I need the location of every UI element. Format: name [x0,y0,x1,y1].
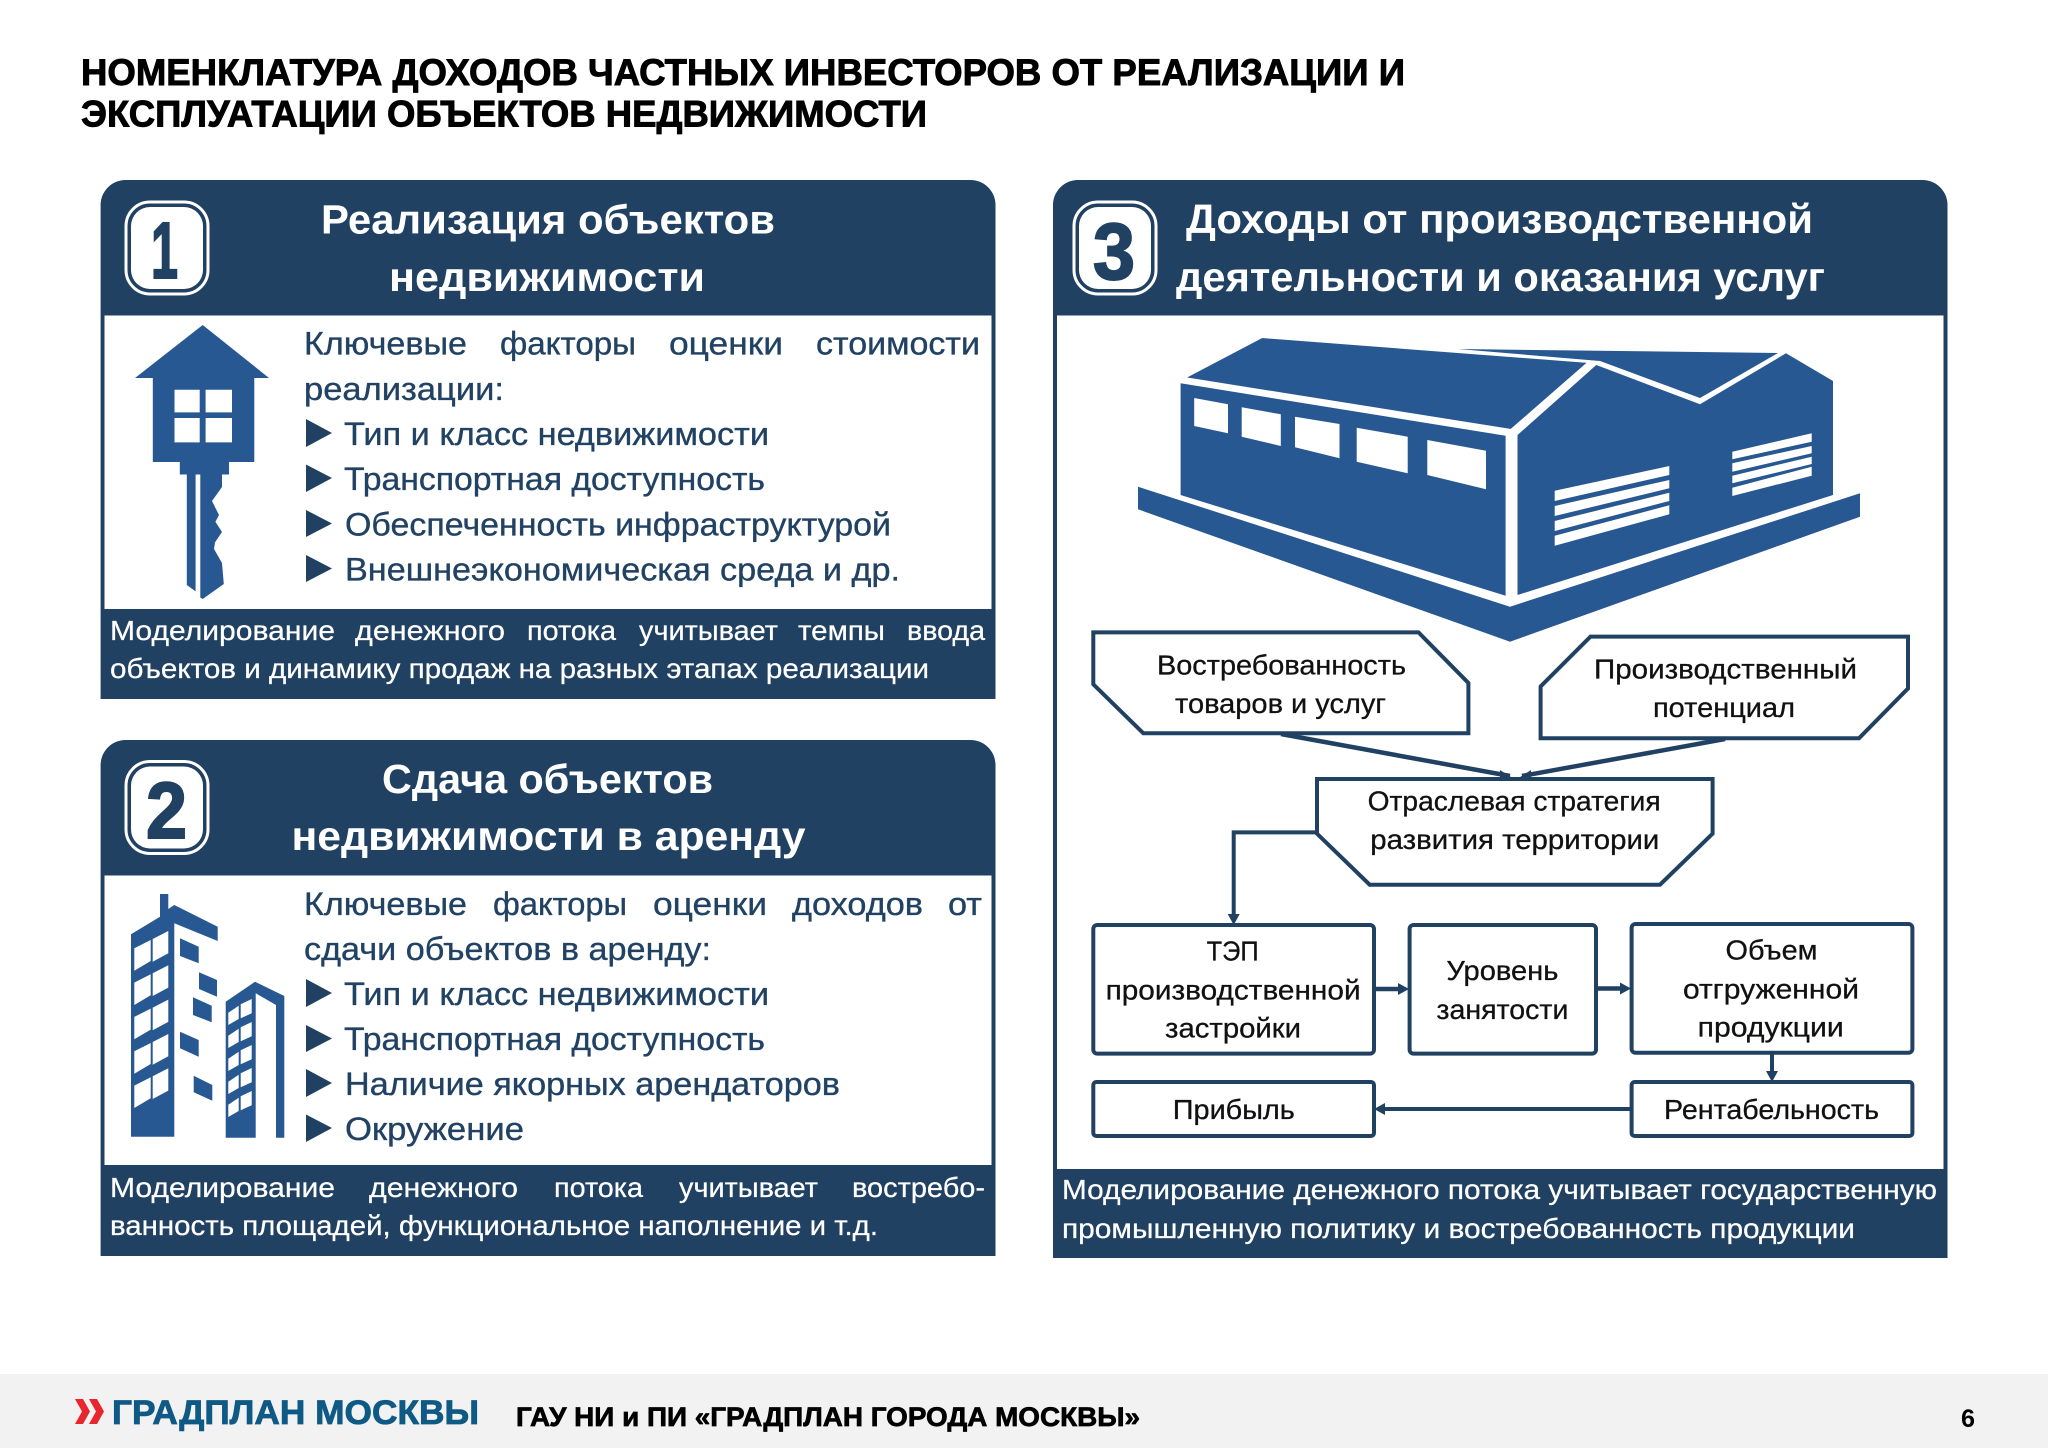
icon: office buildings [131,894,284,1138]
panel 3 heading [1176,196,1825,300]
box: TEP of production development [1093,925,1374,1054]
panel 1 key factors text [304,326,980,407]
panel 1 frame [101,180,996,699]
panel 1 heading: Реализация объектов [321,196,775,242]
panel 2 bullet list: Транспортная доступность [344,1021,765,1057]
panel 2 heading: Сдача объектов [382,756,713,802]
panel: 2 rental of real estate [101,740,996,1256]
panel 1 bullet list: Транспортная доступность [344,461,765,497]
panel 1 footer note: учитывает [639,615,778,646]
box: shipped products volume: продукции [1698,1012,1844,1042]
page number: 6 [1961,1405,1975,1433]
box: profitability [1632,1082,1912,1136]
panel 2 bullet list: Окружение [345,1111,524,1147]
title: НОМЕНКЛАТУРА ДОХОДОВ ЧАСТНЫХ ИНВЕСТОРОВ ОТ РЕАЛИЗАЦИИ И [81,52,1405,93]
box: production potential: Производственный [1594,654,1857,684]
panel 2 key factors text: от [948,886,982,922]
panel 2 key factors text [304,886,982,967]
box: production potential [1541,637,1908,738]
organization name: ГАУ НИ и ПИ «ГРАДПЛАН ГОРОДА МОСКВЫ» [516,1402,1140,1432]
box: shipped products volume: Объем [1726,934,1818,966]
panel 1 bullet list [306,416,900,588]
icon: industrial building [1138,337,1860,642]
title: ЭКСПЛУАТАЦИИ ОБЪЕКТОВ НЕДВИЖИМОСТИ [81,94,927,134]
box: production potential: потенциал [1653,692,1795,723]
arrow: TEP to employment [1374,983,1409,995]
box: sector strategy [1317,779,1713,885]
panel 1 key factors text: факторы [500,326,636,362]
panel 2 key factors text: сдачи объектов в аренду: [304,931,711,967]
panel 2 heading [292,756,806,859]
box: sector strategy: развития территории [1370,824,1659,855]
panel 3 frame [1053,180,1948,1258]
panel 1 footer note: Моделирование [110,615,335,646]
title [81,52,1405,134]
panel 2 footer note [110,1172,985,1241]
logo wordmark: ГРАДПЛАН МОСКВЫ [112,1394,479,1432]
arrow: shipped volume to profitability [1766,1052,1778,1082]
panel 1 body background [104,316,992,609]
panel 3 footer note [1062,1174,1937,1244]
panel: 3 production and services income [1053,180,1948,1258]
panel 2 number badge [126,762,208,855]
panel 1 footer note: потока [527,615,617,646]
panel 3 heading: деятельности и оказания услуг [1176,254,1825,300]
panel 2 footer note: востребо- [852,1172,985,1203]
panel 1 heading [321,196,775,300]
box: shipped products volume [1632,924,1912,1053]
panel 1 footer note: ввода [907,615,986,646]
panel 1 number badge: 1 [151,206,178,295]
box: demand for goods and services [1093,632,1468,733]
panel 2 bullet list: Наличие якорных арендаторов [345,1066,840,1102]
panel 2 number badge: 2 [146,766,187,855]
panel 2 key factors text: Ключевые [304,886,467,922]
panel 3 body background [1057,316,1944,1169]
panel 2 footer note: учитывает [679,1172,818,1203]
icon: red chevrons [75,1399,104,1424]
box: demand for goods and services: товаров и услуг [1175,688,1386,719]
box: TEP of production development: застройки [1165,1012,1301,1044]
panel 1 number badge [126,202,208,295]
box: employment level [1410,925,1596,1054]
panel 2 footer note: денежного [369,1172,518,1203]
panel 2 key factors text: доходов [792,886,923,922]
panel 1 footer note [110,615,986,684]
panel 1 bullet list: Тип и класс недвижимости [344,416,769,452]
panel 1 key factors text: стоимости [816,326,980,362]
footer bar [0,1374,2048,1448]
panel 1 bullet list: Внешнеэкономическая среда и др. [345,552,900,588]
icon: house key [135,325,269,599]
panel 3 footer note: Моделирование денежного потока учитывает государственную [1062,1174,1937,1205]
box: profit [1093,1082,1374,1136]
panel 2 footer note: ванность площадей, функциональное наполнение и т.д. [110,1210,878,1241]
box: sector strategy: Отраслевая стратегия [1368,786,1661,816]
panel 2 body background [104,876,992,1165]
panel 2 heading: недвижимости в аренду [292,813,806,859]
panel 2 key factors text: факторы [493,886,627,922]
panel 1 heading: недвижимости [389,254,705,300]
panel 1 bullet list: Обеспеченность инфраструктурой [345,506,891,542]
arrow: profitability to profit [1374,1103,1631,1115]
arrows into strategy box [1281,734,1725,779]
panel 3 heading: Доходы от производственной [1186,196,1813,242]
panel 3 number badge [1074,202,1156,296]
flowchart [1093,632,1912,1136]
box: profitability: Рентабельность [1664,1094,1879,1125]
box: profit: Прибыль [1173,1094,1295,1125]
panel 2 bullet list: Тип и класс недвижимости [344,976,769,1012]
panel 2 bullet list [306,976,840,1147]
arrow: employment to shipped volume [1596,982,1631,994]
panel 3 number badge: 3 [1093,207,1135,296]
panel 1 footer note: денежного [355,615,505,646]
panel 1 footer note: объектов и динамику продаж на разных этапах реализации [110,653,929,684]
box: shipped products volume: отгруженной [1683,974,1859,1004]
panel 2 frame [101,740,996,1256]
panel 3 footer note: промышленную политику и востребованность продукции [1062,1213,1855,1244]
panel: 1 sale of real estate [101,180,996,699]
panel 2 key factors text: оценки [653,886,767,922]
arrow: strategy to TEP [1228,832,1317,925]
box: employment level: Уровень [1446,955,1558,986]
panel 1 footer note: темпы [798,615,885,646]
panel 1 key factors text: реализации: [304,371,504,407]
panel 2 footer note: Моделирование [110,1172,335,1203]
box: employment level: занятости [1436,994,1568,1025]
panel 1 key factors text: оценки [669,326,783,362]
panel 1 key factors text: Ключевые [304,326,467,362]
box: TEP of production development: производственной [1106,974,1361,1006]
box: TEP of production development: ТЭП [1207,936,1259,966]
panel 2 footer note: потока [554,1172,644,1203]
box: demand for goods and services: Востребованность [1157,650,1406,680]
